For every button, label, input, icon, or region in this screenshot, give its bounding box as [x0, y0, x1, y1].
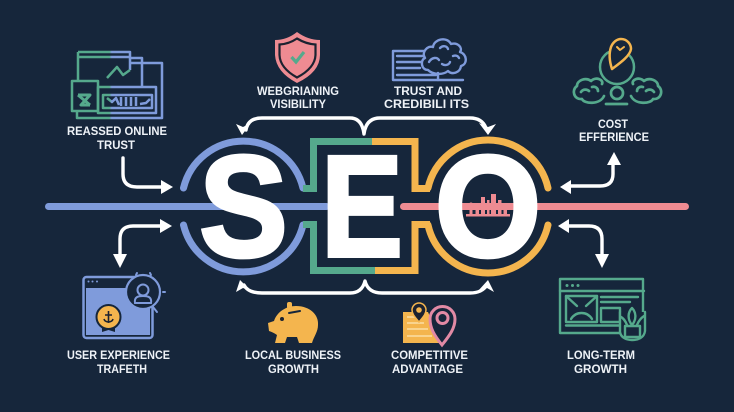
- icon: dashboard windows: [72, 52, 162, 118]
- label: GROWTH: [268, 364, 319, 376]
- icon: document and tree: [393, 39, 466, 80]
- label: WEBGRIANING: [257, 86, 339, 98]
- letter S: S: [199, 127, 288, 287]
- label: TRAFETH: [97, 364, 147, 376]
- panel: trust and credibility: [384, 39, 469, 111]
- icon: piggy bank: [268, 302, 318, 343]
- O ring: [428, 140, 548, 273]
- arrow: user experience two-way: [113, 219, 172, 268]
- top bracket arrows: [236, 118, 496, 135]
- E frame: [303, 142, 430, 270]
- label: USER EXPERIENCE: [67, 350, 170, 362]
- label: COMPETITIVE: [391, 350, 468, 362]
- label: CREDIBILI ITS: [384, 99, 469, 111]
- central SEO diagram: [45, 126, 689, 287]
- label: TRUST: [97, 140, 135, 152]
- horizontal axis line: blue: [45, 203, 330, 210]
- panel: local business growth: [245, 302, 341, 376]
- label: [384, 86, 469, 111]
- label: [245, 350, 341, 376]
- label: LOCAL BUSINESS: [245, 350, 341, 362]
- icon: map with pins: [403, 303, 455, 345]
- label: [257, 86, 339, 111]
- panel: long-term growth: [560, 279, 645, 376]
- panel: reassed online trust: [67, 52, 167, 152]
- label: REASSED ONLINE: [67, 126, 167, 138]
- label: [67, 350, 170, 376]
- bottom bracket arrows: [236, 280, 494, 293]
- label: [567, 350, 635, 376]
- letter O: O: [435, 126, 541, 287]
- label: [67, 126, 167, 152]
- arrow: online trust to S: [123, 158, 173, 194]
- arrow: long-term growth two-way: [558, 219, 609, 268]
- icon: mini bar chart: [466, 194, 510, 216]
- label: GROWTH: [574, 364, 627, 376]
- label: TRUST AND: [394, 86, 462, 98]
- label: EFFERIENCE: [579, 132, 649, 144]
- label: COST: [598, 119, 628, 131]
- label: LONG-TERM: [567, 350, 635, 362]
- label: VISIBILITY: [270, 99, 326, 111]
- panel: web visibility: [257, 32, 339, 111]
- horizontal axis line: pink: [400, 203, 689, 210]
- label: [579, 119, 649, 144]
- panel: cost efficiency: [574, 39, 661, 144]
- label: [391, 350, 468, 376]
- S ring: [184, 141, 303, 272]
- icon: browser with plant: [560, 279, 645, 340]
- icon: shield with check: [275, 32, 320, 83]
- label: ADVANTAGE: [392, 364, 463, 376]
- arrow: cost efficiency two-way: [560, 152, 621, 194]
- letter E: E: [321, 127, 403, 287]
- icon: pin over bushes: [574, 39, 661, 104]
- panel: competitive advantage: [391, 303, 468, 376]
- panel: user experience: [67, 273, 170, 376]
- icon: browser with badge and magnifier: [84, 273, 165, 338]
